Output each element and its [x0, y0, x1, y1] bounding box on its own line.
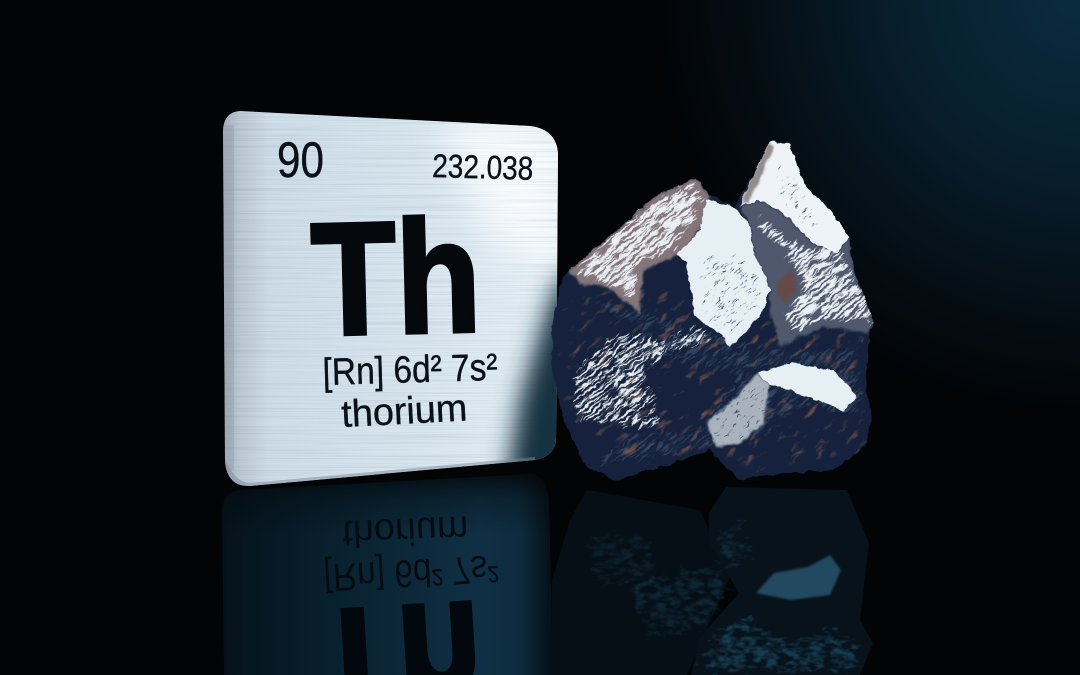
tile reflection — [222, 474, 554, 675]
tile bottom bevel — [225, 457, 535, 486]
rock base — [550, 140, 874, 481]
small rock mottled face — [707, 373, 770, 447]
upper-left white streaks — [576, 182, 706, 298]
left face white streaks — [572, 324, 712, 430]
dark textured faces — [583, 296, 865, 467]
tile left bevel — [223, 125, 234, 470]
reflected thorium label: thorium — [342, 507, 469, 554]
reflected configuration label: [Rn] 6d² 7s² — [322, 546, 500, 599]
rock reflection — [552, 487, 873, 675]
element symbol: Th — [309, 186, 483, 369]
rust blotches — [558, 288, 867, 473]
peak left brown band — [742, 143, 773, 205]
peak hatch — [776, 165, 820, 227]
reflected rock speckled faces — [585, 515, 868, 675]
element name: thorium — [340, 387, 468, 436]
atomic mass: 232.038 — [432, 147, 534, 187]
right face white streaks — [756, 214, 874, 332]
brushed metal texture — [223, 111, 558, 487]
bright peak facet — [740, 142, 848, 253]
tile shadow cast by rock — [489, 259, 557, 464]
central facet dark hatch — [698, 254, 761, 335]
scene: thorium tile and ore on black reflective surface — [222, 0, 1080, 675]
right face base — [740, 200, 873, 347]
tile top-right highlight — [440, 118, 562, 275]
reflected lit facet — [756, 555, 841, 600]
thorium ore rock — [550, 140, 874, 481]
lower lighter blue edge — [556, 387, 872, 481]
atomic number: 90 — [277, 132, 324, 188]
electron configuration: [Rn] 6d² 7s² — [322, 347, 498, 394]
small rock lit top — [757, 363, 857, 410]
rust patch on right face — [777, 270, 797, 303]
element tile — [223, 111, 580, 490]
mottled upper-left face base — [568, 178, 710, 313]
bright central facet — [677, 200, 770, 347]
